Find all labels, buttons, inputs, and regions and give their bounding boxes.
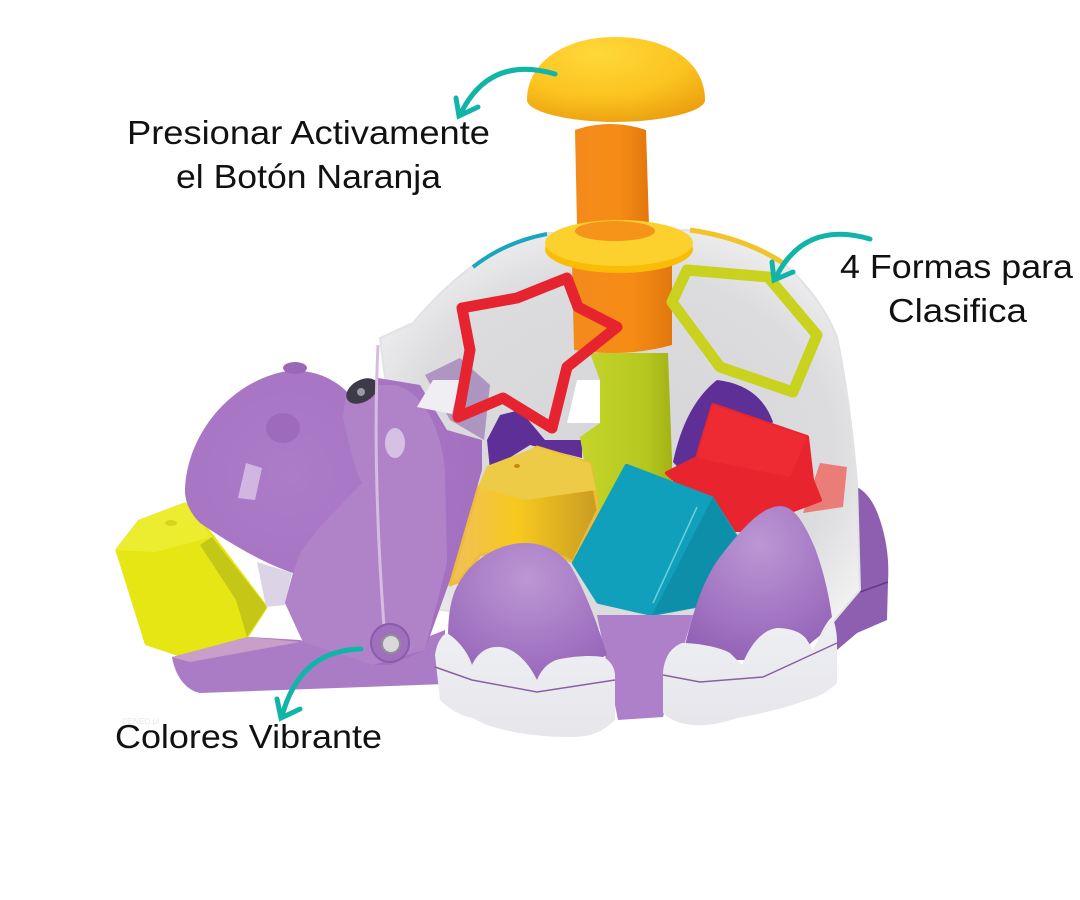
green pole (580, 353, 672, 525)
hippo eye (342, 373, 382, 409)
white piece inside dome (417, 380, 460, 414)
label: press button (127, 114, 490, 195)
purple shape behind blocks (673, 380, 773, 480)
dome yellow rim (690, 230, 783, 263)
purple tint inside dome (425, 358, 490, 440)
head highlight (238, 463, 262, 500)
upper orange stem (575, 124, 649, 225)
yellow collar (545, 220, 693, 273)
dome front band highlight (376, 345, 385, 640)
light red block behind (803, 463, 847, 513)
yellow mushroom button (527, 37, 705, 122)
left foot (435, 543, 615, 737)
jaw flap (285, 385, 447, 665)
arrow: button (456, 69, 555, 116)
lower orange stem (572, 262, 672, 353)
watermark: CENEO.pl (122, 717, 159, 726)
right foot (663, 506, 837, 725)
transparent dome (380, 230, 860, 628)
yellow inner block (450, 447, 598, 585)
lime block in the mouth (115, 503, 267, 655)
label: press button: el Botón Naranja (176, 158, 442, 195)
red star shape (458, 278, 617, 428)
hippo lower jaw (172, 630, 445, 693)
red block (667, 405, 820, 530)
hippo nostril (266, 413, 300, 443)
hinge bolt (371, 624, 409, 662)
white highlight beside pole (567, 380, 600, 423)
label: press button: Presionar Activamente (127, 114, 490, 151)
arrow: shapes (772, 234, 870, 280)
band highlight (385, 428, 405, 458)
rear wheel (825, 487, 888, 650)
dome blue rim (473, 234, 547, 267)
label: shapes: Clasifica (888, 292, 1028, 329)
label: shapes (840, 248, 1074, 329)
purple shape behind star (487, 410, 582, 470)
open mouth interior (257, 562, 292, 607)
toy illustration (115, 37, 888, 737)
label: colors: Colores Vibrante (115, 718, 382, 755)
base strip (597, 615, 693, 720)
arrow: colors (277, 649, 361, 718)
yellow-green hexagon shape (672, 270, 817, 392)
blue block (575, 467, 737, 615)
hippo head (185, 345, 482, 665)
hippo ear (283, 362, 307, 374)
label: shapes: 4 Formas para (840, 248, 1074, 285)
